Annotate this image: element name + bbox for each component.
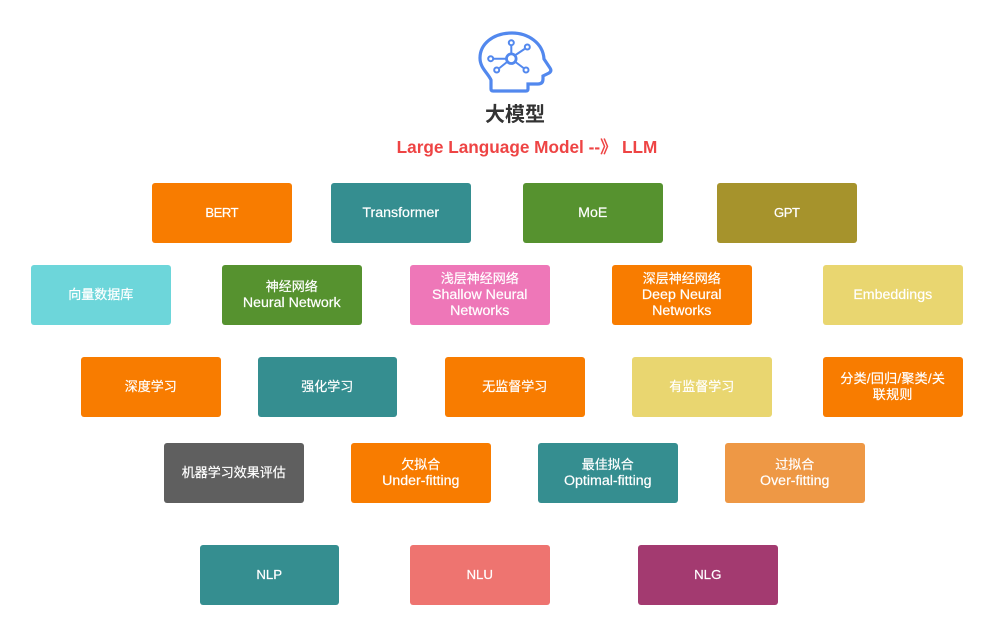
box: deep learning [81, 357, 220, 417]
box: GPT: GPT [774, 205, 800, 220]
box: supervised learning: 有监督学习 [669, 379, 734, 394]
box: over-fitting: Over-fitting [760, 473, 829, 489]
box: shallow neural networks: Networks [450, 303, 509, 319]
box: NLP [200, 545, 339, 605]
box: neural network: Neural Network [243, 295, 341, 311]
box: unsupervised learning [445, 357, 584, 417]
box: Transformer [331, 183, 470, 243]
box: reinforcement learning [258, 357, 397, 417]
box: embeddings: Embeddings [853, 287, 932, 303]
box: deep neural networks: 深层神经网络 [643, 271, 721, 286]
box: under-fitting [351, 443, 490, 503]
box: shallow neural networks: Shallow Neural [432, 287, 527, 303]
box: deep neural networks [612, 265, 752, 325]
box: shallow neural networks [410, 265, 550, 325]
box: unsupervised learning: 无监督学习 [482, 379, 547, 394]
box: NLG [638, 545, 778, 605]
icon: brain network head [478, 31, 552, 93]
box: vector database: 向量数据库 [68, 287, 133, 302]
box: Transformer: Transformer [362, 205, 439, 221]
box: optimal-fitting [538, 443, 678, 503]
box: optimal-fitting: 最佳拟合 [582, 457, 634, 472]
box: shallow neural networks: 浅层神经网络 [441, 271, 519, 286]
box: NLP: NLP [256, 567, 282, 582]
box: BERT: BERT [205, 205, 238, 220]
box: over-fitting [725, 443, 864, 503]
box: NLG: NLG [694, 567, 721, 582]
box: classification regression clustering association: 分类/回归/聚类/关 [840, 371, 945, 386]
title: 大模型 [485, 104, 545, 126]
box: classification regression clustering association: 联规则 [873, 387, 913, 402]
box: classification regression clustering association [823, 357, 962, 417]
box: deep neural networks: Deep Neural [642, 287, 722, 303]
box: neural network: 神经网络 [266, 279, 318, 294]
box: MoE [523, 183, 662, 243]
box: deep neural networks: Networks [652, 303, 711, 319]
box: MoE: MoE [578, 205, 607, 221]
box: deep learning: 深度学习 [125, 379, 177, 394]
box: embeddings [823, 265, 962, 325]
box: BERT [152, 183, 292, 243]
box: NLU [410, 545, 550, 605]
box: under-fitting: Under-fitting [382, 473, 459, 489]
box: NLU: NLU [466, 567, 493, 582]
box: optimal-fitting: Optimal-fitting [564, 473, 652, 489]
subtitle: Large Language Model --》 LLM [397, 137, 657, 157]
box: reinforcement learning: 强化学习 [301, 379, 353, 394]
box: supervised learning [632, 357, 772, 417]
box: vector database [31, 265, 170, 325]
box: neural network [222, 265, 362, 325]
box: ML evaluation: 机器学习效果评估 [182, 465, 286, 480]
box: ML evaluation [164, 443, 304, 503]
box: under-fitting: 欠拟合 [401, 457, 440, 472]
box: GPT [717, 183, 856, 243]
box: over-fitting: 过拟合 [775, 457, 814, 472]
